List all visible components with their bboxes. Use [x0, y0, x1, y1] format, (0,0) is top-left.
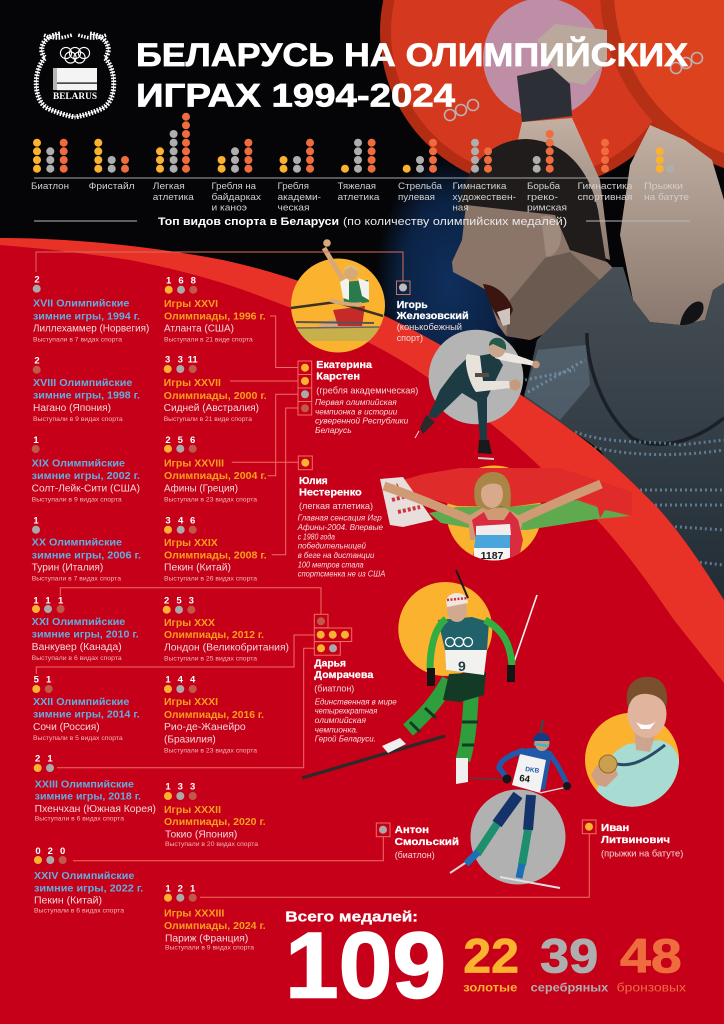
callout: Darya Domracheva: (биатлон) — [314, 683, 354, 694]
callout: Ekaterina Karsten: Карстен — [316, 370, 360, 382]
red band — [0, 238, 724, 1024]
callout: Darya Domracheva: олимпийская — [315, 716, 367, 725]
entry: Beijing 2008: Выступали в 26 видах спорта — [164, 576, 257, 583]
entry: Rio 2016: Рио-де-Жанейро — [164, 722, 246, 733]
entry: Pyeongchang 2018: зимние игры, 2018 г. — [35, 790, 141, 802]
entry: Nagano 1998: Нагано (Япония) — [33, 403, 111, 414]
entry: Atlanta 1996: 8 — [191, 275, 196, 286]
entry: Beijing 2022: зимние игры, 2022 г. — [34, 882, 143, 894]
callout: Yulia Nesterenko: в беге на дистанции — [298, 551, 375, 560]
callout: Darya Domracheva: Дарья — [314, 658, 346, 670]
entry: Sydney 2000: Олимпиады, 2000 г. — [164, 390, 267, 402]
entry: Vancouver 2010: Ванкувер (Канада) — [32, 642, 122, 653]
entry: Atlanta 1996: Олимпиады, 1996 г. — [164, 310, 266, 322]
totals: bronze: бронзовых — [617, 982, 686, 994]
callout: Ivan Litvinovich: Иван — [601, 822, 629, 834]
entry: Beijing 2008: Игры XXIX — [164, 537, 218, 549]
entry: Beijing 2008 — [164, 516, 267, 583]
athlete photo: Darya Domracheva — [302, 570, 537, 784]
athlete photo: Yulia Nesterenko — [380, 466, 632, 562]
entry: Sochi 2014: зимние игры, 2014 г. — [33, 708, 140, 720]
entry: Beijing 2022: XXIV Олимпийские — [34, 870, 134, 882]
red panel — [0, 245, 724, 1024]
entry: Turin 2006: XX Олимпийские — [32, 536, 122, 548]
entry: Beijing 2022: 2 — [48, 846, 53, 857]
entry: Beijing 2008: 4 — [178, 516, 184, 527]
entry: Tokyo 2020: Выступали в 20 видах спорта — [165, 841, 258, 848]
entry: Athens 2004 — [164, 435, 267, 503]
entry: Lillehammer 1994: Лиллехаммер (Норвегия) — [33, 324, 149, 334]
entry: Pyeongchang 2018: XXIII Олимпийские — [35, 778, 134, 790]
sport labels: греко- — [527, 192, 558, 202]
entry: Salt Lake City 2002: Солт-Лейк-Сити (США) — [32, 483, 140, 494]
entry: Sydney 2000: Игры XXVII — [164, 377, 221, 389]
entry: Atlanta 1996: Атланта (США) — [164, 324, 234, 335]
entry: Lillehammer 1994 — [33, 274, 149, 343]
sport labels: на батуте — [644, 192, 689, 202]
entry: Athens 2004: Игры XXVIII — [164, 458, 224, 470]
entry: Beijing 2008: 6 — [190, 516, 195, 527]
entry: Lillehammer 1994: зимние игры, 1994 г. — [33, 310, 140, 322]
entry: Beijing 2022: 0 — [60, 846, 65, 857]
entry: London 2012: Олимпиады, 2012 г. — [164, 629, 264, 641]
entry: Salt Lake City 2002: Выступали в 9 видах спорта — [32, 496, 122, 503]
entry: Paris 2024: Выступали в 9 видах спорта — [165, 945, 254, 952]
entry: Paris 2024: 1 — [165, 884, 171, 895]
entry: Pyeongchang 2018: 2 — [35, 753, 40, 764]
entry: Atlanta 1996: Игры XXVI — [164, 298, 218, 310]
callout: Ivan Litvinovich: Литвинович — [601, 834, 670, 846]
callout: Anton Smolsky: Смольский — [395, 836, 459, 848]
entry: London 2012 — [163, 595, 289, 663]
entry: Rio 2016: 4 — [190, 675, 196, 686]
entry: London 2012: Лондон (Великобритания) — [164, 642, 289, 654]
callout: Ekaterina Karsten: чемпионка в истории — [315, 407, 398, 416]
sport labels: Стрельба — [398, 181, 442, 191]
sport labels: Гребля — [278, 181, 309, 191]
chart caption: (по количеству олимпийских медалей) — [343, 216, 567, 228]
callout: Igor Zhelezovsky: (конькобежный — [397, 322, 462, 333]
sport labels: художествен- — [452, 192, 516, 202]
callout: Yulia Nesterenko: Нестеренко — [299, 486, 362, 498]
entry: Paris 2024: 1 — [190, 884, 196, 895]
entry: Lillehammer 1994: Выступали в 7 видах спорта — [33, 336, 122, 343]
athlete photo: Darya Domracheva: 9 — [458, 658, 466, 674]
entry: Athens 2004: Олимпиады, 2004 г. — [164, 470, 267, 482]
entry: Rio 2016: (Бразилия) — [164, 734, 216, 745]
sport labels: атлетика — [153, 192, 194, 202]
entry: Beijing 2022: Выступали в 6 видах спорта — [34, 907, 124, 914]
sport labels: Легкая — [153, 181, 185, 191]
entry: Tokyo 2020: Олимпиады, 2020 г. — [164, 816, 266, 828]
callout: Darya Domracheva: чемпионка. — [315, 725, 358, 734]
entry: Tokyo 2020: 1 — [165, 782, 171, 793]
column: shooting — [403, 139, 437, 173]
logo: Belarus NOC emblem — [36, 34, 114, 117]
callout: Igor Zhelezovsky: Игорь — [397, 299, 428, 311]
totals: bronze — [617, 930, 686, 994]
callout: Yulia Nesterenko: Афины-2004. Впервые — [297, 523, 384, 532]
entry: Sochi 2014: 1 — [46, 674, 52, 685]
totals: total medals: 109 — [285, 912, 446, 1018]
entry: London 2012: Игры XXX — [164, 617, 215, 629]
sport labels: Фристайл — [89, 181, 135, 191]
entry: Atlanta 1996: Выступали в 21 виде спорта — [164, 337, 253, 344]
column: freestyle — [94, 139, 129, 173]
entry: Atlanta 1996: 6 — [178, 275, 184, 286]
callout: Ivan Litvinovich: (прыжки на батуте) — [601, 848, 683, 859]
entry: Paris 2024: Олимпиады, 2024 г. — [164, 920, 266, 932]
entry: Pyeongchang 2018: Выступали в 6 видах спорта — [35, 815, 124, 822]
callout: Darya Domracheva: Герой Беларуси. — [315, 735, 376, 744]
entry: London 2012: 3 — [189, 595, 194, 606]
entry: Salt Lake City 2002: зимние игры, 2002 г. — [32, 470, 140, 482]
column: canoe — [218, 139, 252, 173]
totals: total medals: Всего медалей: — [285, 910, 418, 926]
entry: Salt Lake City 2002 — [32, 435, 140, 503]
entry: Athens 2004: Афины (Греция) — [164, 482, 238, 494]
column: athletics — [156, 113, 190, 173]
entry: Sydney 2000 — [164, 355, 267, 423]
callout: Anton Smolsky: (биатлон) — [395, 850, 435, 861]
entry: Tokyo 2020: 3 — [178, 782, 183, 793]
totals: gold: золотые — [463, 982, 517, 994]
entry: Athens 2004: 5 — [178, 435, 184, 446]
sport labels: Борьба — [527, 181, 560, 191]
entry: Pyeongchang 2018 — [34, 753, 156, 822]
athlete photo: Igor Zhelezovsky — [415, 330, 540, 459]
entry: Tokyo 2020: 3 — [190, 782, 195, 793]
entry: Paris 2024: Игры XXXIII — [164, 908, 224, 920]
callout: Anton Smolsky — [376, 823, 459, 861]
entry: Turin 2006: 1 — [33, 515, 39, 526]
sport labels: Гимнастика — [452, 181, 506, 191]
entry: Beijing 2022 — [34, 846, 143, 914]
entry: Lillehammer 1994: 2 — [34, 274, 40, 285]
entry: Beijing 2008: 3 — [165, 516, 171, 527]
callout: Igor Zhelezovsky — [396, 281, 469, 344]
entry: Vancouver 2010: XXI Олимпийские — [32, 616, 125, 628]
entry: Nagano 1998: 2 — [34, 355, 40, 366]
entry: Nagano 1998: Выступали в 9 видах спорта — [33, 416, 123, 423]
sport labels: академи- — [278, 192, 321, 202]
logo: Belarus NOC emblem: BELARUS — [53, 91, 97, 101]
title: ИГРАХ 1994-2024 — [136, 78, 455, 114]
entry: London 2012: Выступали в 25 видах спорта — [164, 656, 257, 663]
sport labels: Гимнастика — [578, 181, 632, 191]
entry: Sochi 2014: Сочи (Россия) — [33, 722, 100, 733]
sport labels: атлетика — [338, 192, 380, 202]
entry: Sydney 2000: Сидней (Австралия) — [164, 403, 259, 414]
callout: Darya Domracheva: Домрачева — [314, 669, 373, 681]
sport labels: Гребля на — [212, 181, 256, 191]
totals: silver — [531, 930, 609, 994]
entry: Athens 2004: 2 — [165, 435, 171, 446]
callout: Yulia Nesterenko: Главная сенсация Игр — [298, 514, 382, 523]
entry: Beijing 2022: 0 — [35, 846, 41, 857]
entry: Turin 2006: зимние игры, 2006 г. — [32, 550, 141, 562]
entry: Nagano 1998: XVIII Олимпийские — [33, 377, 132, 389]
sport labels: пулевая — [398, 192, 435, 202]
entry: Nagano 1998 — [33, 355, 140, 423]
entry: Sochi 2014: Выступали в 5 видах спорта — [33, 735, 123, 742]
entry: Atlanta 1996 — [164, 275, 266, 344]
sport labels: байдарках — [212, 192, 262, 202]
column: rhythmic gymnastics — [471, 139, 492, 173]
callout: Ekaterina Karsten: Беларусь — [315, 426, 352, 435]
entry: Vancouver 2010: Выступали в 6 видах спорта — [32, 655, 122, 662]
athlete photo: Anton Smolsky: DKB — [525, 766, 540, 775]
athlete photo: Ivan Litvinovich — [585, 677, 680, 812]
callout: Ekaterina Karsten — [298, 359, 418, 435]
column: wrestling — [533, 130, 554, 173]
sport labels: римская — [527, 202, 567, 212]
callout: Ekaterina Karsten: Первая олимпийская — [315, 398, 397, 407]
callout: Igor Zhelezovsky: спорт) — [397, 333, 423, 344]
sport labels: Прыжки — [644, 181, 683, 191]
sport labels — [31, 181, 689, 212]
entry: Tokyo 2020: Токио (Япония) — [165, 830, 237, 841]
callout: Yulia Nesterenko: (легкая атлетика) — [299, 501, 373, 512]
entry: Paris 2024: Париж (Франция) — [165, 933, 248, 944]
column: rowing — [280, 139, 314, 173]
athlete photo: Anton Smolsky — [450, 720, 571, 888]
callout: Darya Domracheva: Единственная в мире — [315, 697, 397, 706]
entry: Salt Lake City 2002: XIX Олимпийские — [32, 458, 125, 470]
title — [136, 37, 689, 114]
callout: Ekaterina Karsten: (гребля академическая) — [316, 385, 418, 396]
entry: Turin 2006: Турин (Италия) — [32, 562, 103, 573]
entry: Rio 2016: Олимпиады, 2016 г. — [164, 709, 264, 721]
callout: Darya Domracheva: четырехкратная — [315, 707, 378, 716]
sport labels: Биатлон — [31, 181, 69, 191]
athlete photo: Anton Smolsky: 64 — [519, 773, 531, 786]
callout: Anton Smolsky: Антон — [395, 824, 429, 836]
entry: Turin 2006 — [32, 515, 141, 582]
entry: Rio 2016: Выступали в 23 видах спорта — [164, 747, 257, 754]
entry: London 2012: 2 — [164, 595, 169, 606]
entry: Sydney 2000: 3 — [165, 355, 170, 366]
callout: Yulia Nesterenko: спортсменка не из США — [298, 570, 385, 579]
callout: Darya Domracheva — [314, 614, 397, 744]
totals: silver: 39 — [540, 930, 598, 983]
chart: top sports by medals — [31, 113, 690, 212]
entry: Sydney 2000: 3 — [178, 355, 183, 366]
callout: Yulia Nesterenko — [297, 456, 385, 579]
entry: Rio 2016: 4 — [178, 675, 184, 686]
entry: Rio 2016 — [164, 675, 264, 754]
entry: Sochi 2014 — [32, 674, 140, 742]
column: biathlon — [33, 139, 68, 173]
athlete photo: Ekaterina Karsten — [291, 239, 385, 352]
column: weightlifting — [341, 139, 376, 173]
entry: Vancouver 2010: 1 — [58, 595, 64, 606]
entry: Vancouver 2010 — [32, 595, 139, 662]
entry: Turin 2006: Выступали в 7 видах спорта — [32, 575, 121, 582]
entry: Vancouver 2010: 1 — [33, 595, 39, 606]
entry: Tokyo 2020 — [164, 782, 266, 848]
title: БЕЛАРУСЬ НА ОЛИМПИЙСКИХ — [136, 37, 689, 73]
entry: Sochi 2014: 5 — [34, 674, 40, 685]
entry: Paris 2024 — [164, 884, 266, 952]
entry: Athens 2004: Выступали в 23 видах спорта — [164, 496, 257, 503]
entry: Sochi 2014: XXII Олимпийские — [33, 696, 129, 708]
totals: gold: 22 — [463, 930, 519, 983]
connector lines — [36, 252, 589, 897]
entry: Lillehammer 1994: XVII Олимпийские — [33, 298, 129, 310]
totals: silver: серебряных — [531, 982, 609, 994]
entry: Rio 2016: 1 — [165, 675, 171, 686]
chart caption: Топ видов спорта в Беларуси — [158, 216, 339, 228]
entry: Tokyo 2020: Игры XXXII — [164, 804, 221, 816]
entry: Sydney 2000: Выступали в 21 виде спорта — [164, 416, 252, 423]
entry: Nagano 1998: зимние игры, 1998 г. — [33, 390, 140, 402]
callout: Yulia Nesterenko: с 1980 года — [298, 532, 335, 541]
entry: Paris 2024: 2 — [178, 884, 183, 895]
entry: Vancouver 2010: 1 — [45, 595, 51, 606]
entry: Salt Lake City 2002: 1 — [33, 435, 39, 446]
column: trampoline — [656, 147, 674, 173]
callout: Yulia Nesterenko: Юлия — [299, 475, 328, 487]
callout: Ekaterina Karsten: Екатерина — [316, 359, 372, 371]
entry: Atlanta 1996: 1 — [166, 275, 172, 286]
totals: bronze: 48 — [620, 930, 682, 983]
sport labels: спортивная — [578, 192, 633, 202]
entry: Sydney 2000: 11 — [188, 355, 198, 366]
entry: Pyeongchang 2018: Пхенчхан (Южная Корея) — [35, 804, 156, 815]
entry: Rio 2016: Игры XXXI — [164, 696, 218, 708]
column: artistic gymnastics — [601, 139, 609, 173]
sport labels: Тяжелая — [338, 181, 376, 191]
callout: Yulia Nesterenko: победительницей — [298, 542, 367, 551]
entry: London 2012: 5 — [176, 595, 182, 606]
chart caption — [34, 216, 690, 228]
callout: Ekaterina Karsten: суверенной Республики — [315, 417, 409, 426]
entry: Beijing 2008: Пекин (Китай) — [164, 562, 231, 573]
sport labels: и каноэ — [212, 202, 247, 212]
callout: Igor Zhelezovsky: Железовский — [396, 310, 469, 322]
athlete photo: Yulia Nesterenko: 1187 — [481, 550, 504, 562]
sport labels: ческая — [278, 202, 310, 212]
callout: Yulia Nesterenko: 100 метров стала — [298, 560, 364, 569]
callout: Ivan Litvinovich — [582, 820, 683, 859]
entry: Athens 2004: 6 — [190, 435, 195, 446]
entry: Beijing 2022: Пекин (Китай) — [34, 895, 102, 906]
entry: Beijing 2008: Олимпиады, 2008 г. — [164, 550, 267, 562]
entry: Pyeongchang 2018: 1 — [47, 753, 53, 764]
sport labels: ная — [452, 202, 469, 212]
entry: Vancouver 2010: зимние игры, 2010 г. — [32, 628, 139, 640]
